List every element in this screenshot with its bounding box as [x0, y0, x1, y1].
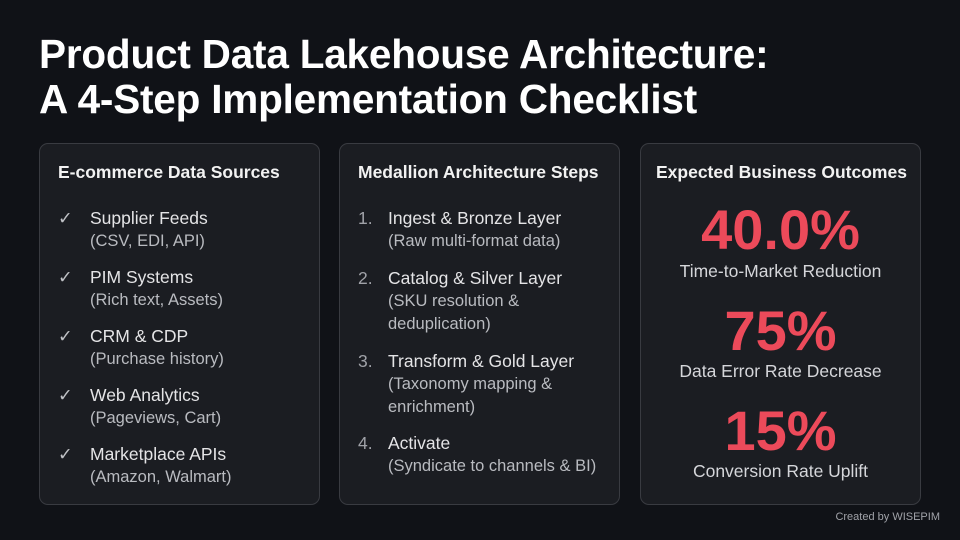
heading: data sources: E-commerce Data Sources	[58, 162, 280, 182]
step 3: (Taxonomy mapping &	[388, 375, 552, 393]
step 3: enrichment)	[388, 398, 475, 416]
item: PIM: ✓	[58, 267, 73, 287]
stat: 40%: 40.0%	[701, 198, 860, 261]
item: supplier feeds	[58, 208, 208, 250]
item: web analytics	[58, 385, 221, 427]
step 3	[358, 351, 574, 416]
item: supplier feeds: Supplier Feeds	[90, 208, 208, 228]
stat: 15%: 15%	[724, 399, 837, 462]
item: marketplace: ✓	[58, 444, 73, 464]
heading: outcomes: Expected Business Outcomes	[656, 162, 907, 182]
item: marketplace	[58, 444, 232, 486]
item: web analytics: (Pageviews, Cart)	[90, 409, 221, 427]
credit: Created by WISEPIM	[835, 511, 940, 523]
step 4: 4.	[358, 433, 373, 453]
panel: outcomes	[640, 143, 921, 505]
panel: medallion steps	[339, 143, 620, 505]
step 1	[358, 208, 561, 250]
step 2	[358, 268, 562, 333]
title	[39, 31, 768, 122]
heading: medallion steps: Medallion Architecture Steps	[358, 162, 599, 182]
item: web analytics: ✓	[58, 385, 73, 405]
title: A 4-Step Implementation Checklist	[39, 76, 697, 122]
step 2: 2.	[358, 268, 373, 288]
item: PIM	[58, 267, 223, 309]
step 4: (Syndicate to channels & BI)	[388, 457, 596, 475]
item: PIM: (Rich text, Assets)	[90, 291, 223, 309]
label: time to market: Time-to-Market Reduction	[680, 261, 881, 281]
step 3: Transform & Gold Layer	[388, 351, 574, 371]
step 2: Catalog & Silver Layer	[388, 268, 562, 288]
label: error rate: Data Error Rate Decrease	[679, 361, 882, 381]
item: CRM: ✓	[58, 326, 73, 346]
step 1: 1.	[358, 208, 373, 228]
step 4	[358, 433, 596, 475]
title: Product Data Lakehouse Architecture:	[39, 31, 768, 77]
step 1: Ingest & Bronze Layer	[388, 208, 561, 228]
item: CRM	[58, 326, 224, 368]
label: conversion: Conversion Rate Uplift	[693, 461, 868, 481]
step 3: 3.	[358, 351, 373, 371]
item: web analytics: Web Analytics	[90, 385, 200, 405]
item: CRM: (Purchase history)	[90, 350, 224, 368]
step 2: (SKU resolution &	[388, 292, 519, 310]
item: marketplace: (Amazon, Walmart)	[90, 468, 232, 486]
step 1: (Raw multi-format data)	[388, 232, 560, 250]
item: marketplace: Marketplace APIs	[90, 444, 226, 464]
step 2: deduplication)	[388, 315, 491, 333]
item: supplier feeds: (CSV, EDI, API)	[90, 232, 205, 250]
item: CRM: CRM & CDP	[90, 326, 188, 346]
item: supplier feeds: ✓	[58, 208, 73, 228]
item: PIM: PIM Systems	[90, 267, 193, 287]
stat: 75%: 75%	[724, 299, 837, 362]
panel: data sources	[39, 143, 320, 505]
step 4: Activate	[388, 433, 450, 453]
